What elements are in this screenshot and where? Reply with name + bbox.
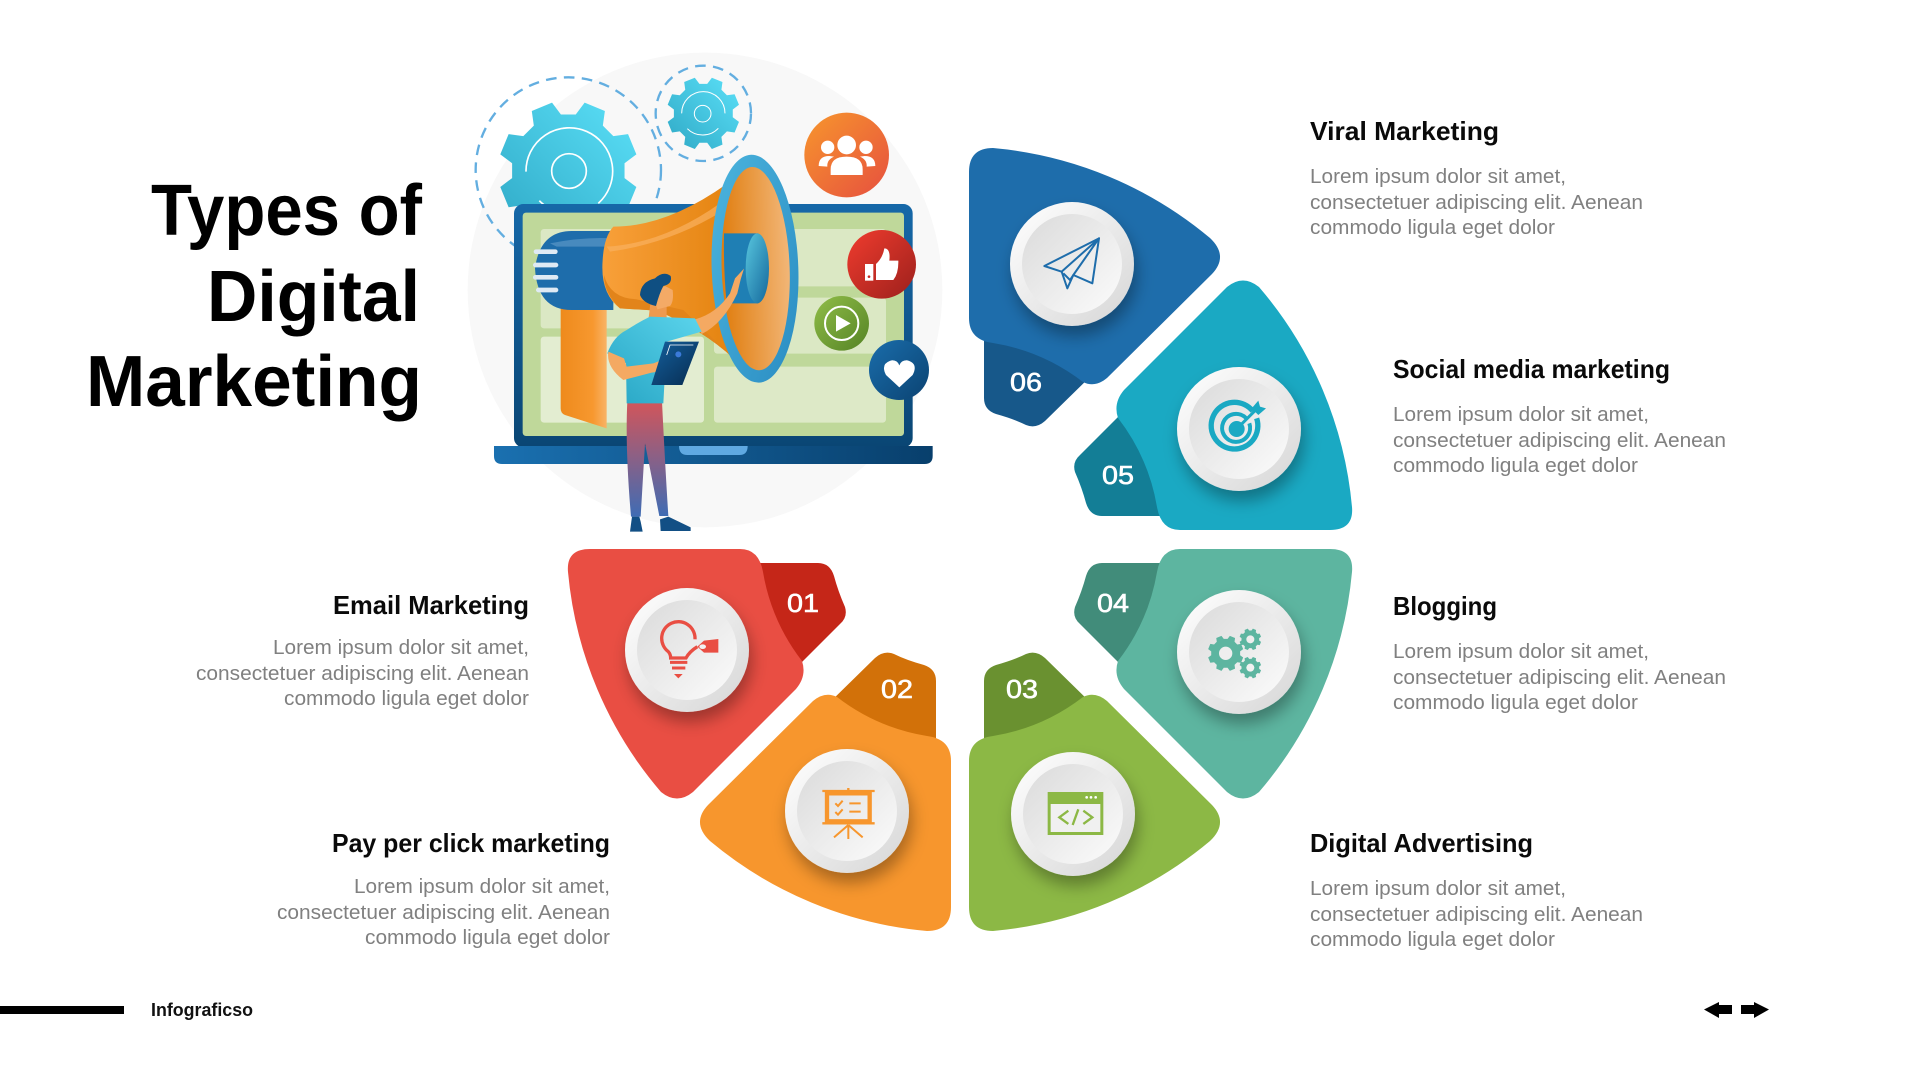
number 04: 04 (1097, 588, 1129, 618)
segment 01 (568, 549, 804, 798)
text: Viral Marketing: consectetuer adipiscing elit. Aenean (1310, 192, 1643, 214)
small gear (668, 78, 739, 149)
text: Pay per click marketing: commodo ligula eget dolor (365, 927, 610, 949)
text: Digital Advertising: Lorem ipsum dolor sit amet, (1310, 878, 1566, 900)
number tab 06 (984, 330, 1095, 426)
segment 05 (1116, 280, 1352, 530)
number 05: 05 (1102, 460, 1134, 490)
icon: presentation board (822, 788, 875, 839)
laptop (494, 204, 933, 464)
text: Email Marketing: Email Marketing (333, 590, 529, 620)
title (86, 171, 423, 422)
tablet (651, 342, 699, 385)
background circle (468, 53, 942, 527)
panel 02: Pay per click marketing segment (700, 653, 951, 931)
title: Types of (151, 171, 423, 251)
number tab 05 (1074, 410, 1170, 516)
text: Social media marketing: commodo ligula eget dolor (1393, 455, 1638, 477)
text: Blogging (1393, 591, 1726, 714)
button 03 (1011, 752, 1135, 876)
number 03: 03 (1006, 674, 1038, 704)
icon: people badge (804, 113, 889, 197)
text: Pay per click marketing (277, 828, 610, 949)
number tab 02 (825, 653, 936, 749)
text: Blogging: consectetuer adipiscing elit. Aenean (1393, 667, 1726, 689)
number tab 01 (750, 563, 846, 669)
icon: paper plane (1044, 238, 1099, 288)
segment 04 (1116, 549, 1352, 798)
panel 06: Viral Marketing segment (969, 148, 1220, 426)
icon: next arrow (1741, 1002, 1769, 1018)
text: Email Marketing (196, 590, 529, 710)
large gear (500, 103, 636, 239)
text: Digital Advertising: consectetuer adipiscing elit. Aenean (1310, 904, 1643, 926)
text: Blogging: commodo ligula eget dolor (1393, 692, 1638, 714)
text: Social media marketing: Lorem ipsum dolor sit amet, (1393, 404, 1649, 426)
icon: heart badge (869, 340, 929, 400)
text: Pay per click marketing: consectetuer adipiscing elit. Aenean (277, 902, 610, 924)
text: Social media marketing (1393, 354, 1726, 477)
icon: play badge (814, 296, 869, 351)
text: Email Marketing: consectetuer adipiscing elit. Aenean (196, 663, 529, 685)
text: Blogging: Blogging (1393, 591, 1497, 621)
dashed orbit small (656, 66, 751, 161)
icon: code window (1048, 792, 1103, 835)
text: Digital Advertising: commodo ligula eget dolor (1310, 929, 1555, 951)
number 01: 01 (787, 588, 819, 618)
button 05 (1177, 367, 1301, 491)
text: Digital Advertising: Digital Advertising (1310, 828, 1533, 858)
text: Viral Marketing: Lorem ipsum dolor sit amet, (1310, 166, 1566, 188)
illustration: marketer with megaphone and laptop (468, 53, 942, 532)
segment 03 (969, 695, 1220, 931)
button 06 (1010, 202, 1134, 326)
number tab 04 (1074, 563, 1170, 669)
text: Pay per click marketing: Pay per click marketing (332, 828, 610, 858)
text: Email Marketing: commodo ligula eget dolor (284, 688, 529, 710)
number 06: 06 (1010, 367, 1042, 397)
number 02: 02 (881, 674, 913, 704)
text: Email Marketing: Lorem ipsum dolor sit amet, (273, 637, 529, 659)
icon: target (1211, 401, 1266, 449)
icon: thumbs up badge (847, 230, 916, 299)
icon: gears (1208, 629, 1261, 678)
button 01 (625, 588, 749, 712)
text: Social media marketing: consectetuer adipiscing elit. Aenean (1393, 430, 1726, 452)
text: Social media marketing: Social media marketing (1393, 354, 1670, 384)
footer bar (0, 1006, 124, 1014)
panel 01: Email Marketing segment (568, 549, 846, 798)
icon: previous arrow (1704, 1002, 1732, 1018)
segment 02 (700, 695, 951, 931)
title: Digital (207, 257, 420, 337)
icon: light bulb with tag (662, 622, 718, 678)
text: Viral Marketing (1310, 116, 1643, 239)
number tab 03 (984, 653, 1095, 749)
dashed orbit large (476, 77, 661, 263)
panel 03: Digital Advertising segment (969, 653, 1220, 931)
panel 04: Blogging segment (1074, 549, 1352, 798)
text: Pay per click marketing: Lorem ipsum dolor sit amet, (354, 876, 610, 898)
person (607, 269, 744, 532)
footer brand: Infograficso (151, 1000, 253, 1020)
text: Viral Marketing: commodo ligula eget dolor (1310, 217, 1555, 239)
text: Digital Advertising (1310, 828, 1643, 951)
button 04 (1177, 590, 1301, 714)
title: Marketing (86, 342, 422, 422)
text: Viral Marketing: Viral Marketing (1310, 116, 1499, 146)
panel 05: Social media marketing segment (1074, 280, 1352, 530)
text: Blogging: Lorem ipsum dolor sit amet, (1393, 641, 1649, 663)
megaphone (535, 153, 802, 428)
segment 06 (969, 148, 1220, 384)
button 02 (785, 749, 909, 873)
